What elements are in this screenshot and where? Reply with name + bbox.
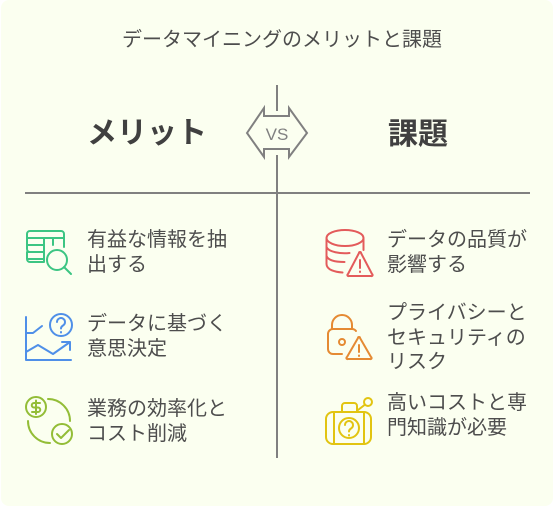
challenge 2: text: プライバシーと	[387, 302, 527, 324]
challenge 2: text: セキュリティの	[387, 326, 526, 348]
icon: lock warning	[327, 314, 373, 360]
merit 3: text: コスト削減	[87, 422, 187, 444]
merit 1: text: 出する	[87, 254, 147, 276]
icon: table with magnifier	[26, 230, 72, 275]
challenge 1: text	[387, 228, 527, 276]
heading: challenges: 課題	[388, 118, 448, 151]
merit 2: text: データに基づく	[87, 313, 227, 335]
merit 1: text	[87, 229, 227, 276]
merit 3: text	[87, 398, 227, 444]
challenge 3: text: 門知識が必要	[387, 416, 507, 438]
title: データマイニングのメリットと課題	[122, 29, 442, 51]
challenge 2: text	[387, 302, 527, 373]
challenge 1: text: 影響する	[387, 254, 467, 276]
heading: merits: メリット	[87, 117, 207, 150]
challenge 2: text: リスク	[387, 351, 447, 373]
challenge 1: text: データの品質が	[387, 229, 527, 251]
challenge 3: text: 高いコストと専	[387, 392, 527, 414]
icon: database warning	[326, 229, 374, 278]
icon: briefcase with question	[325, 397, 373, 445]
challenge 3: text	[387, 392, 527, 438]
icon: money and check	[25, 396, 73, 445]
vs badge: VS	[266, 125, 288, 144]
merit 3: text: 業務の効率化と	[87, 398, 227, 420]
vs badge	[246, 104, 308, 160]
icon: chart with question	[25, 313, 73, 361]
merit 2: text	[87, 312, 227, 360]
merit 1: text: 有益な情報を抽	[87, 229, 227, 251]
merit 2: text: 意思決定	[87, 338, 167, 360]
